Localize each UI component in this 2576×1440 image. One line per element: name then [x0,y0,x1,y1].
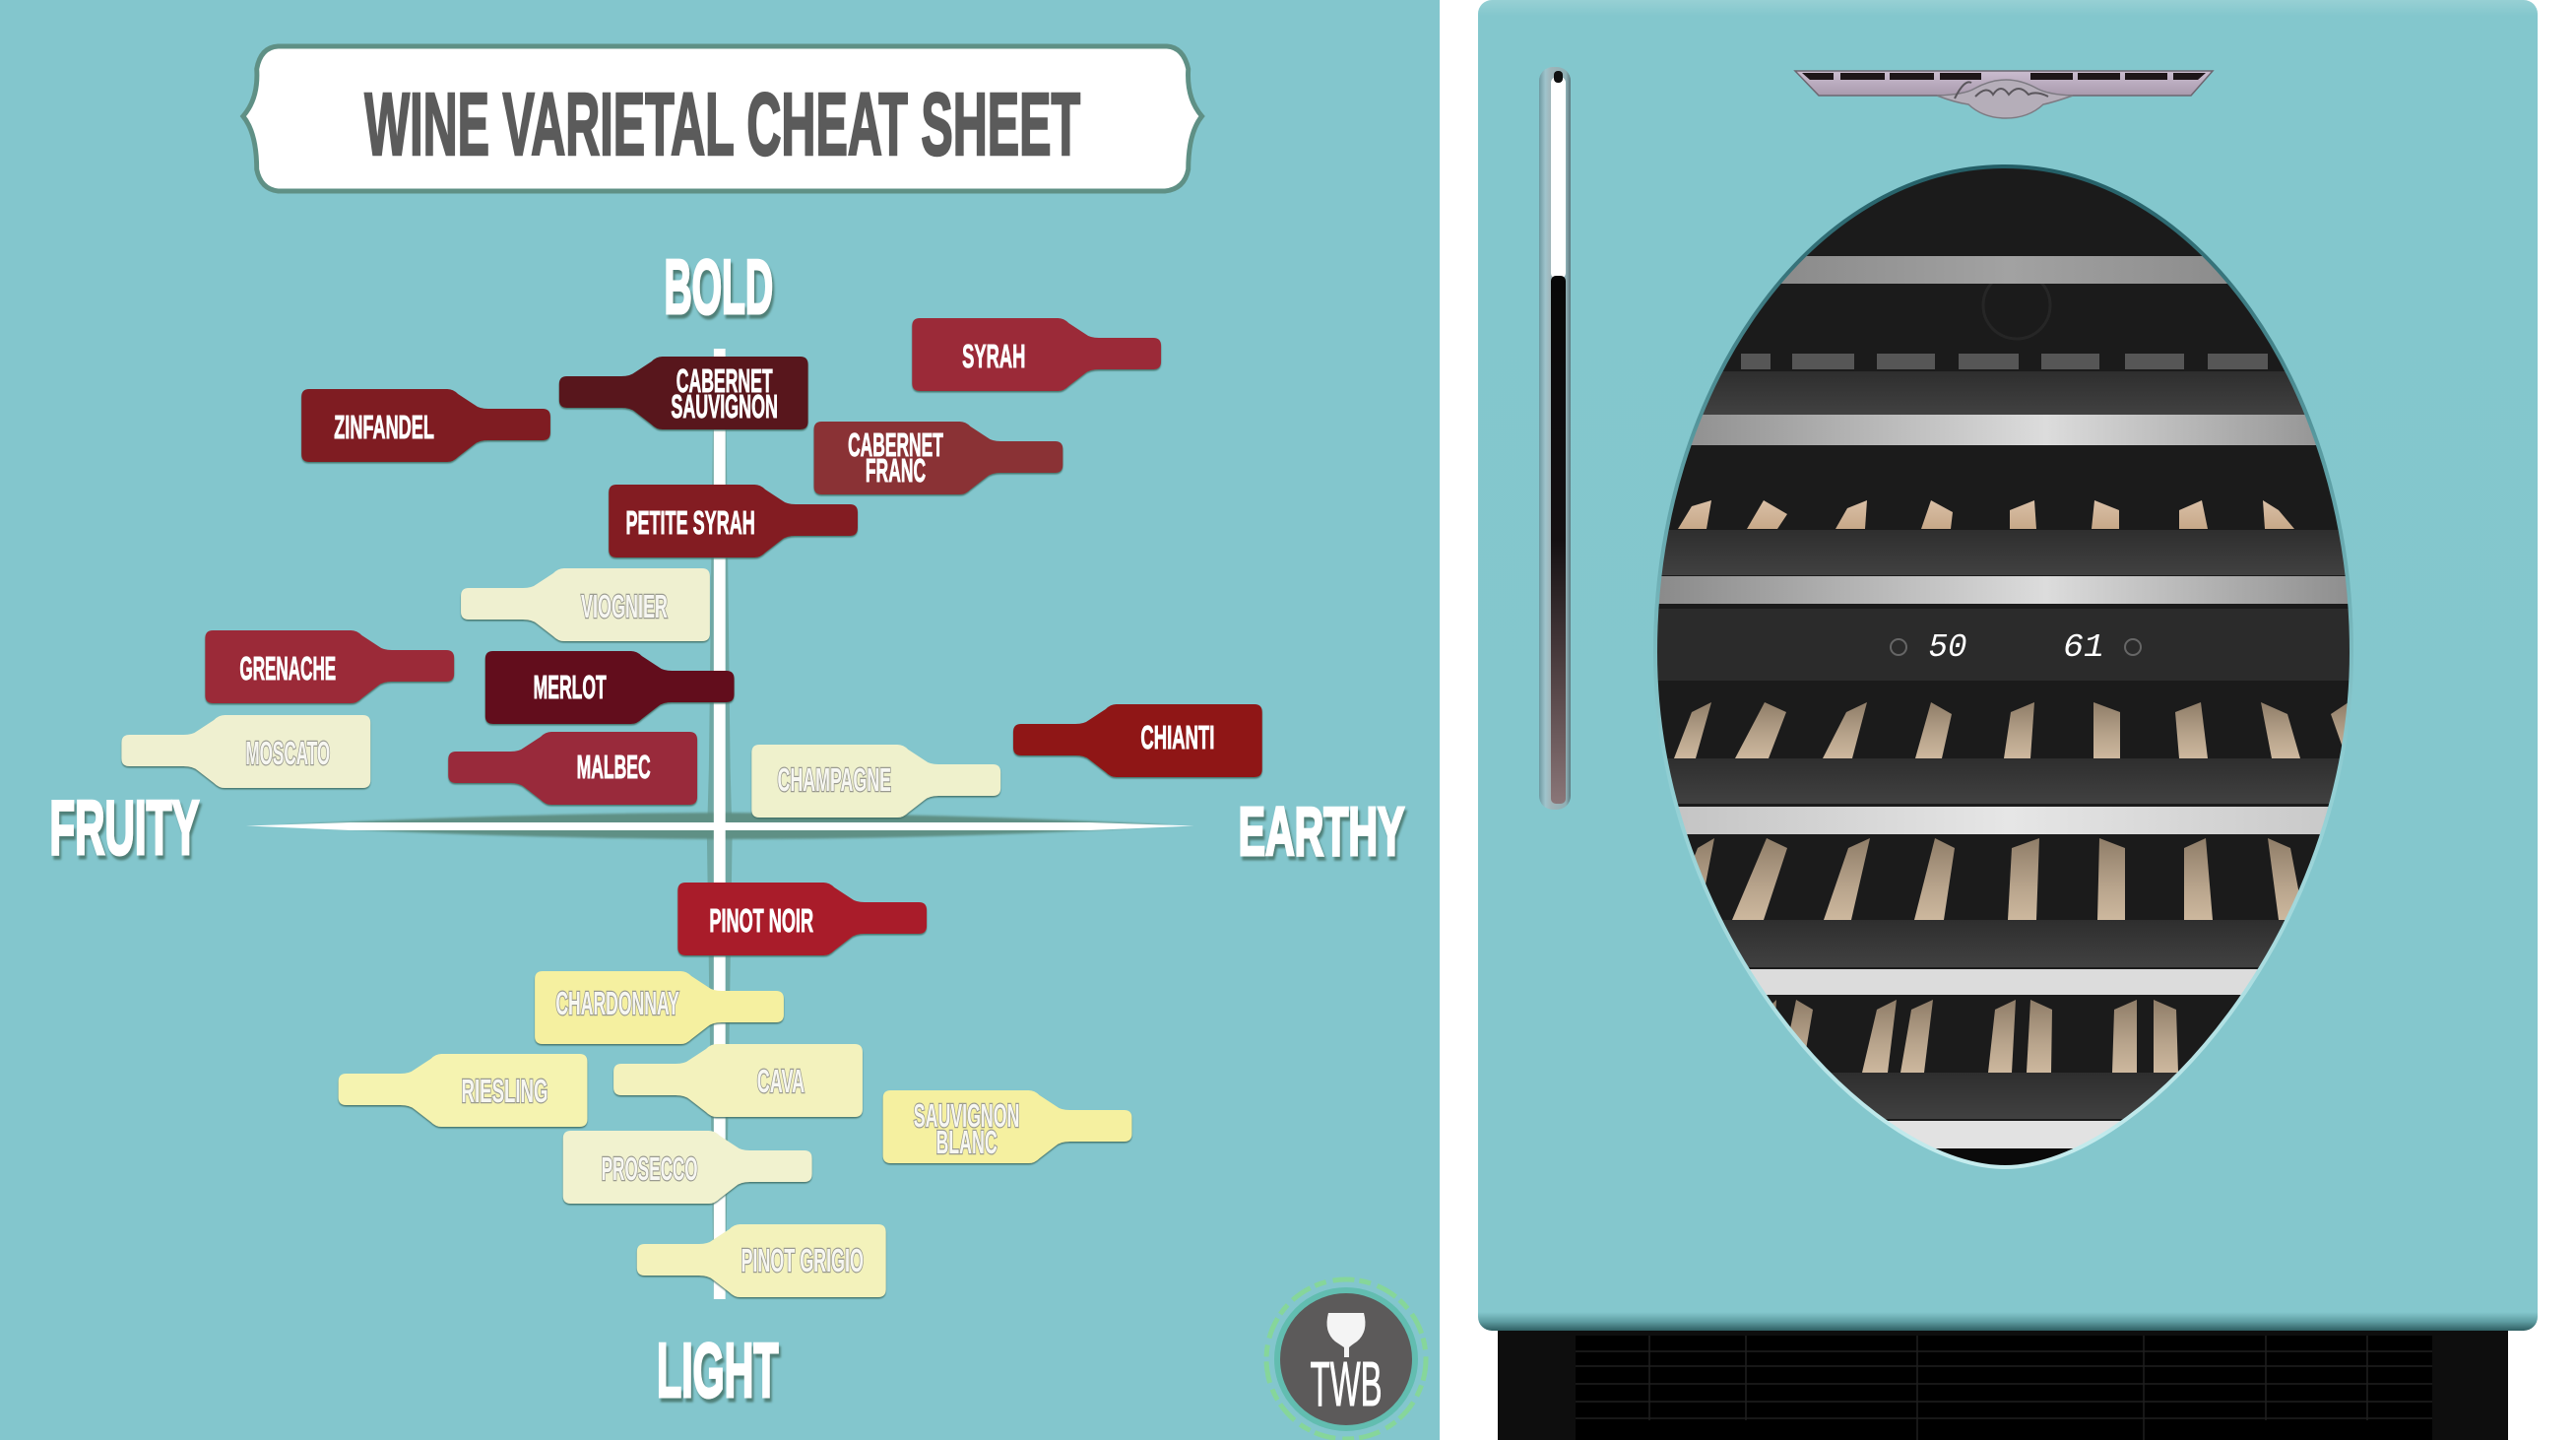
rack row 2 [1674,702,2363,758]
rack row 1 [1678,500,2294,529]
shelf bar 3 [1635,576,2383,604]
bottle: grenache: GRENACHE [239,650,336,687]
bottle: chardonnay [535,971,784,1044]
bottle: pinot grigio: PINOT GRIGIO [741,1242,864,1278]
bottle: cabernet franc [814,422,1063,494]
bottle: riesling [339,1054,587,1127]
logo: TWB [1266,1279,1426,1439]
bottle: riesling: RIESLING [462,1073,547,1109]
bottle: moscato [121,715,370,788]
axis label: bold: BOLD [664,245,773,330]
logo: TWB: TWB [1310,1348,1383,1419]
bottle: syrah: SYRAH [962,338,1025,374]
rack row 3 [1669,838,2304,920]
fridge base grille [1498,1320,2508,1440]
temperature display: 50 [1928,629,1967,666]
chart content [49,46,1404,1413]
shelf bar 6 [1888,1121,2121,1148]
bottle: cabernet sauvignon: SAUVIGNON [671,388,778,425]
bottle: chardonnay: CHARDONNAY [555,985,679,1021]
bottle: cava [613,1044,863,1117]
bottle: sauvignon blanc [883,1090,1131,1163]
control panel [1635,609,2383,681]
shelf bar 1 [1780,256,2227,284]
fridge door [1478,0,2538,1331]
top rack slats [1741,354,2268,369]
bottle: cabernet sauvignon [559,357,808,429]
title banner [243,46,1202,191]
bottle: malbec [448,732,697,805]
bottle: grenache [205,630,454,703]
bottle: chianti [1013,704,1262,777]
bottle: champagne: CHAMPAGNE [778,761,891,798]
bottle: syrah [912,318,1161,391]
bottle: viognier [461,568,710,641]
shelf bar 5 [1750,969,2257,995]
bottle: malbec: MALBEC [577,749,651,785]
axis label: earthy: EARTHY [1239,793,1404,870]
bottle: champagne [751,745,1000,818]
bottle: merlot [485,651,735,724]
bottle: pinot noir [677,883,927,955]
bottle: zinfandel: ZINFANDEL [334,409,434,445]
bottle: cabernet sauvignon: CABERNET [676,362,773,399]
bottle: chianti: CHIANTI [1140,719,1214,755]
temperature display [1890,634,2142,656]
bottle: merlot: MERLOT [534,669,607,705]
bottle: cava: CAVA [757,1063,805,1099]
oval window with shelves [1635,158,2383,1182]
bottle: sauvignon blanc: BLANC [935,1124,998,1160]
axes cross [246,349,1194,1299]
title banner: WINE VARIETAL CHEAT SHEET [364,74,1080,173]
bottle: sauvignon blanc: SAUVIGNON [914,1097,1019,1134]
bottle: pinot grigio [637,1224,886,1297]
bottle: petite syrah [609,485,858,557]
door handle [1539,67,1571,810]
fan [1981,284,2052,341]
bottle: moscato: MOSCATO [245,735,330,771]
bottle: prosecco: PROSECCO [602,1150,698,1187]
shelf bar 2 [1692,415,2316,445]
bottle: viognier: VIOGNIER [581,588,668,624]
bottle: prosecco [563,1131,812,1204]
shelf bar 4 [1678,807,2328,834]
bottle: petite syrah: PETITE SYRAH [625,504,755,541]
rack row 4 [1772,1000,2178,1073]
bottle: pinot noir: PINOT NOIR [709,902,813,939]
brand emblem [1795,71,2213,118]
bottle: zinfandel [301,389,550,462]
axis label: fruity: FRUITY [49,786,199,871]
bottle: cabernet franc: CABERNET [848,426,943,463]
bottle: cabernet franc: FRANC [866,452,926,489]
panel: wine fridge [1478,0,2538,1440]
panel: wine varietal chart [0,0,1440,1440]
temperature display: 61 [2063,629,2104,666]
axis label: light: LIGHT [657,1329,778,1413]
